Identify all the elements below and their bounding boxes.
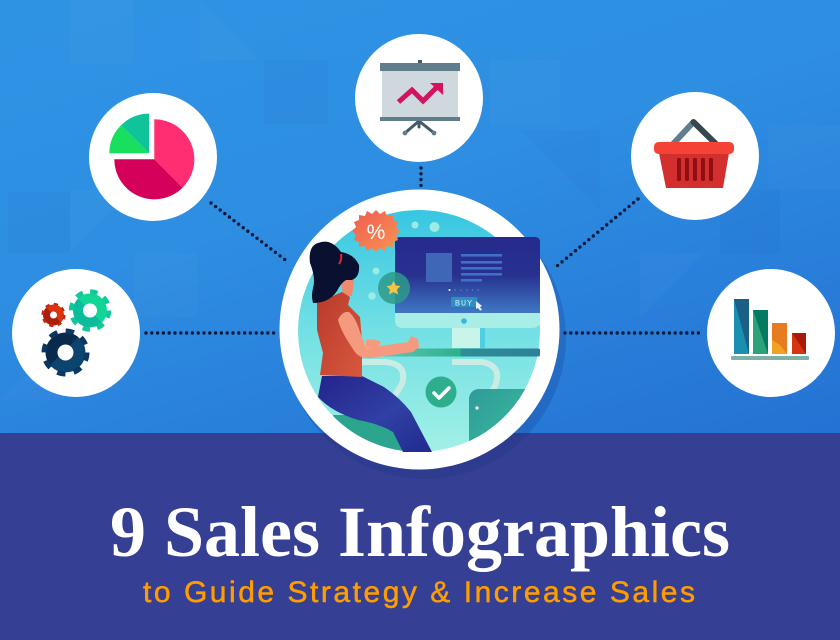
discount badge: %	[367, 221, 385, 244]
ring shadow	[284, 197, 566, 479]
connector dots	[146, 168, 702, 333]
icon: gears	[12, 269, 140, 397]
woman at desk	[310, 242, 432, 452]
central illustration	[280, 190, 566, 479]
icon: shopping basket	[631, 92, 759, 220]
star token	[378, 272, 410, 304]
monitor	[395, 237, 540, 348]
icon: bar chart	[707, 269, 835, 397]
subtitle: to Guide Strategy & Increase Sales	[143, 576, 695, 609]
white ring	[280, 190, 560, 470]
scene background	[298, 210, 544, 469]
monitor: BUY	[455, 298, 473, 308]
title: 9 Sales Infographics	[110, 492, 730, 572]
floating dots	[368, 222, 440, 300]
desk	[380, 348, 540, 356]
check token	[426, 376, 456, 408]
discount badge	[352, 210, 400, 252]
icon: pie chart	[89, 93, 217, 221]
bottom title band	[0, 433, 840, 640]
icon: presentation board	[355, 34, 483, 162]
